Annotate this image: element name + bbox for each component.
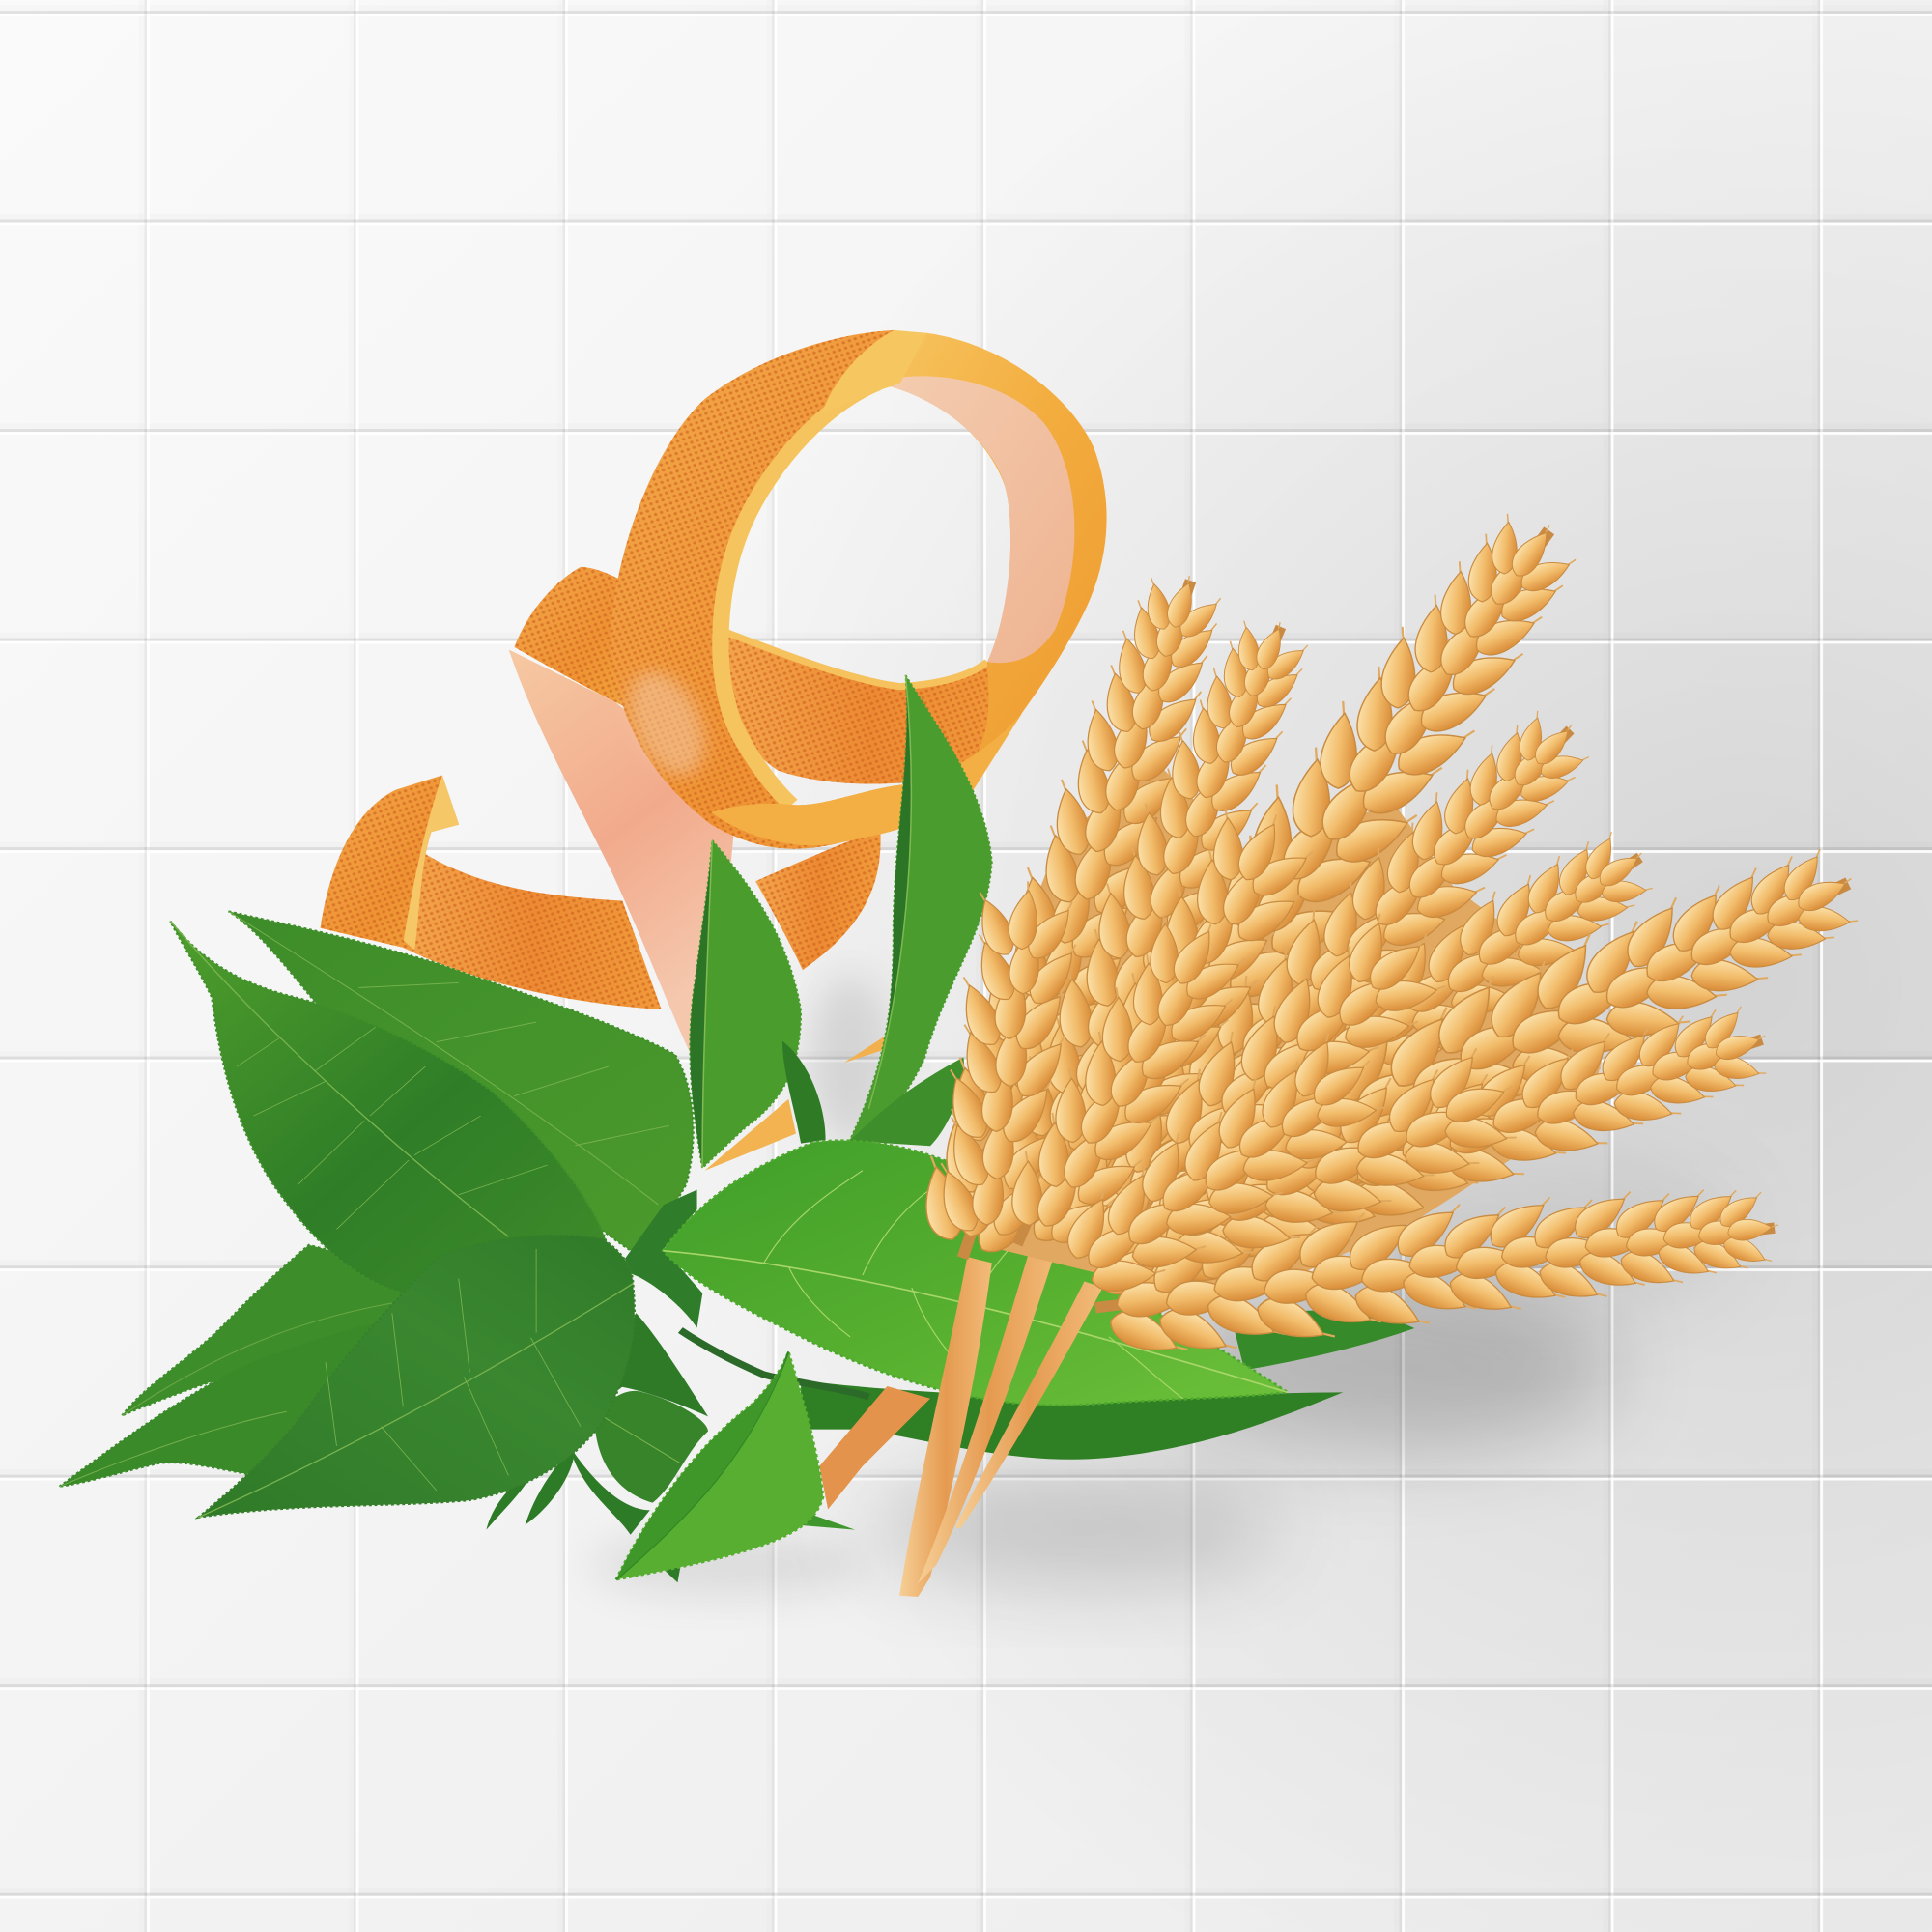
leaf: small back center — [603, 1313, 708, 1416]
peel: ring front band — [611, 330, 1022, 849]
peel: ring rim — [811, 332, 1107, 776]
wheat ear: upper left — [887, 552, 1264, 1282]
leaf: bright center — [663, 1141, 1288, 1406]
leaf: upper back — [229, 911, 694, 1254]
wheat ear: short filler, right — [1135, 1026, 1540, 1299]
dark twig — [680, 1330, 868, 1397]
leaf: long lower left — [59, 1321, 402, 1487]
wheat ear: short front low — [1037, 1009, 1411, 1327]
leaf: large upper front — [170, 922, 606, 1293]
peel: middle ribbon behind the ring — [720, 630, 1022, 784]
leaf: large front dark, drawn in zoomed coordinates — [198, 1236, 635, 1518]
wheat ear: upper tip — [1002, 473, 1621, 1234]
leaf node — [625, 1190, 702, 1327]
orange peel spiral — [321, 330, 1107, 1063]
peel: lower tail — [844, 1019, 933, 1063]
leaf: small upright near peel — [690, 840, 801, 1168]
wheat ear: bottom horizontal — [1087, 1151, 1787, 1379]
wheat ear: second left — [948, 594, 1348, 1272]
leaf: small blades under the cluster — [486, 1446, 855, 1582]
leaf: back right small — [1233, 1311, 1414, 1370]
wheat ear: short front center — [977, 892, 1274, 1272]
leaf: tall upright — [850, 675, 992, 1146]
wheat: inner mass — [974, 764, 1602, 1306]
leaf: small dark lower center — [594, 1391, 708, 1503]
leaf: narrow bud — [782, 1041, 826, 1144]
wheat ear: right upper — [1045, 674, 1625, 1267]
wheat ear: right middle — [1030, 791, 1684, 1300]
peel: ring inner pith — [877, 376, 1074, 663]
wheat ear: short filler, middle — [1093, 889, 1474, 1241]
peel: lower left curl end — [321, 776, 459, 951]
wheat ear: short filler, upper — [1040, 784, 1344, 1186]
peel fragment behind leaves — [705, 1099, 796, 1171]
leaf: far left lower — [122, 1245, 437, 1415]
tea leaves — [59, 675, 1414, 1582]
peel: pink pith ribbon — [509, 649, 733, 1063]
wheat stems, broken left bundle — [819, 1386, 930, 1509]
wheat ear: longest right — [1093, 801, 1889, 1302]
wheat ear: short front left — [916, 872, 1099, 1250]
cast shadows on the wall — [591, 974, 1737, 1597]
wheat ear: lower right — [1070, 963, 1789, 1332]
leaf cluster on the left, drawn in zoomed coordinates — [59, 911, 868, 1582]
peel: upper left ribbon — [514, 567, 634, 711]
leaf: back right lower — [801, 1380, 1343, 1460]
leaf: front bright lower — [616, 1351, 823, 1579]
wheat stems — [899, 1233, 1103, 1597]
wheat bunch — [887, 473, 1889, 1379]
peel: lower ribbon — [404, 841, 662, 1009]
peel: back right band — [755, 830, 881, 970]
